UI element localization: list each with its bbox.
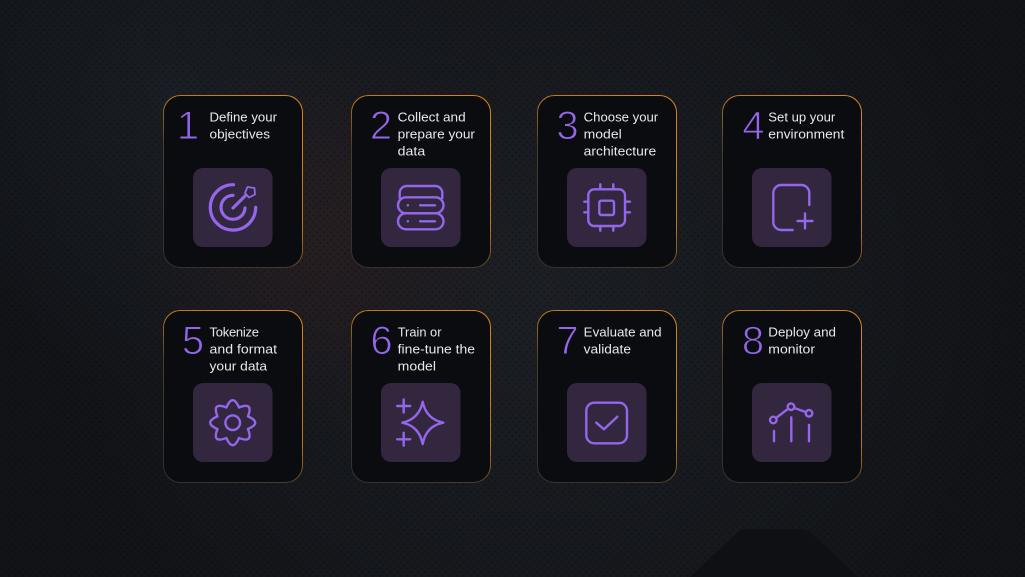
label 5: your data — [210, 358, 268, 374]
number 2: 2 — [370, 104, 392, 148]
label 7: Evaluate and — [584, 324, 662, 340]
label 6: model — [398, 358, 436, 374]
icon box 8 — [752, 383, 832, 462]
icon: line chart — [770, 403, 812, 441]
label 5: and format — [210, 342, 277, 356]
icon: server stack — [398, 186, 444, 229]
label 8: Deploy and — [768, 324, 836, 340]
card 6: train or fine-tune the model — [352, 310, 490, 482]
label 6: Train or — [398, 324, 442, 340]
label 2: data — [398, 144, 426, 158]
number 8: 8 — [742, 319, 764, 363]
label 4: environment — [768, 126, 845, 142]
label 3: Choose your — [584, 110, 659, 124]
icon: checkbox — [586, 403, 627, 443]
label 7: validate — [584, 342, 631, 356]
label 3: architecture — [584, 144, 656, 158]
card 7: evaluate and validate — [538, 310, 676, 482]
card 8: deploy and monitor — [722, 310, 862, 482]
icon: chip — [584, 184, 630, 231]
number 4: 4 — [742, 104, 765, 148]
label 8: monitor — [768, 342, 816, 356]
label 3: model — [584, 126, 622, 142]
label 4: Set up your — [768, 110, 836, 124]
icon box 3 — [567, 168, 646, 247]
icon box 6 — [381, 383, 460, 462]
icon: new file plus — [773, 185, 812, 230]
icon box 7 — [567, 383, 646, 462]
icon box 5 — [193, 383, 272, 462]
label 1: objectives — [210, 126, 271, 142]
icon: target with dart — [210, 185, 256, 230]
card 5: tokenize and format your data — [164, 310, 302, 482]
number 3: 3 — [556, 104, 579, 148]
icon box 2 — [381, 168, 460, 247]
number 1: 1 — [177, 104, 199, 148]
icon box 1 — [193, 168, 272, 247]
number 5: 5 — [182, 319, 204, 363]
label 2: prepare your — [398, 126, 476, 142]
label 5: Tokenize — [210, 324, 259, 340]
card 2: collect and prepare your data — [352, 96, 490, 268]
label 6: fine-tune the — [398, 342, 475, 356]
card 3: choose your model architecture — [538, 96, 676, 268]
label 2: Collect and — [398, 110, 466, 124]
icon: gear — [210, 400, 255, 445]
number 7: 7 — [556, 319, 579, 363]
number 6: 6 — [370, 319, 393, 363]
label 1: Define your — [210, 110, 278, 124]
icon box 4 — [752, 168, 832, 247]
card 1: define your objectives — [164, 96, 302, 268]
icon: sparkle — [397, 400, 443, 446]
card 4: set up your environment — [722, 96, 862, 268]
